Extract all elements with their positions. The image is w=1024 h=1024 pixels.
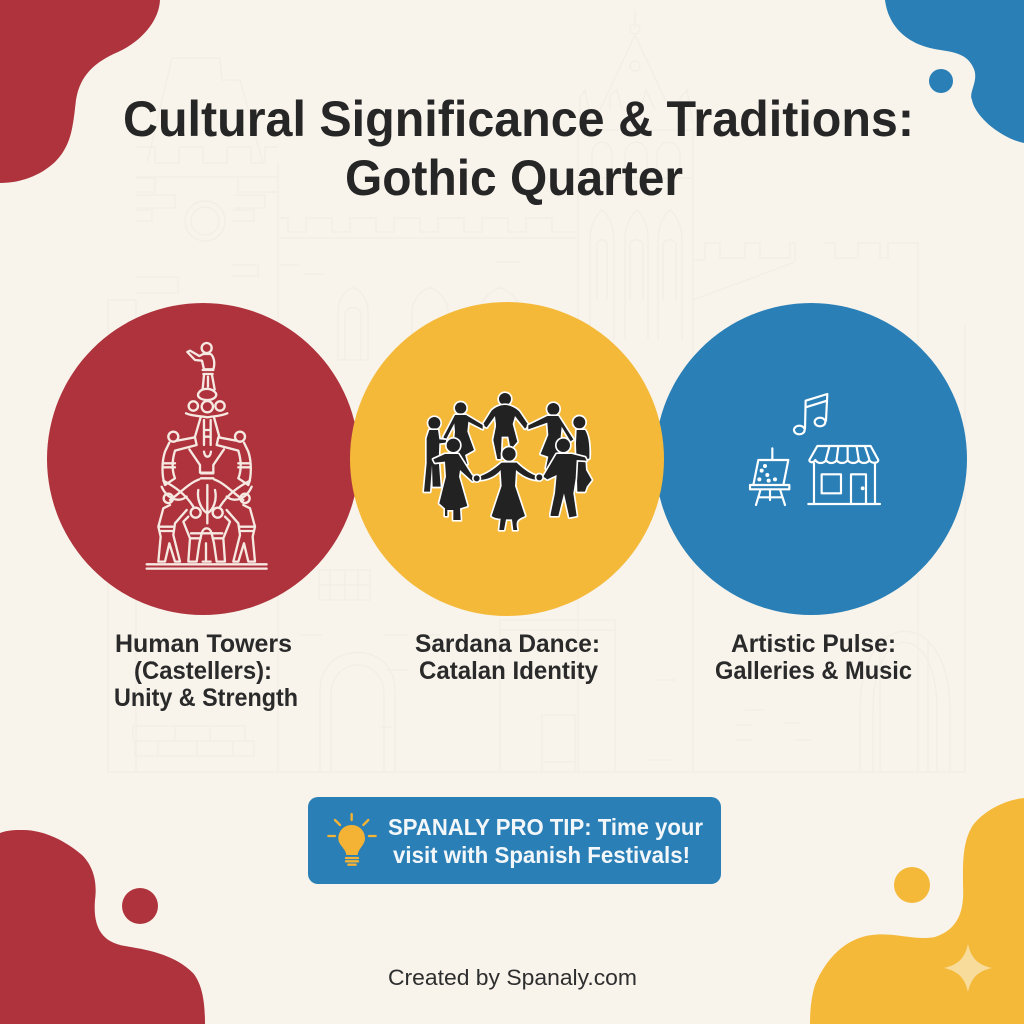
icon: human tower bbox=[147, 343, 267, 569]
title: Gothic Quarter bbox=[345, 150, 683, 206]
label: artistic pulse: Artistic Pulse: bbox=[731, 630, 896, 658]
background: Gothic Quarter building outline bbox=[108, 10, 965, 772]
blob: top-left red bbox=[0, 0, 160, 183]
panel: artistic pulse circle bbox=[655, 303, 967, 615]
icon: sparkle bbox=[944, 944, 992, 992]
callout: pro tip bbox=[308, 797, 721, 884]
icon: music notes bbox=[794, 394, 827, 434]
panel: human towers circle bbox=[47, 303, 359, 615]
text: pro tip: visit with Spanish Festivals! bbox=[393, 842, 690, 868]
dot: yellow bbox=[894, 867, 930, 903]
text: pro tip bbox=[388, 814, 703, 868]
icon: light bulb bbox=[328, 814, 376, 865]
label: sardana dance: Catalan Identity bbox=[419, 657, 598, 685]
label: human towers bbox=[114, 630, 298, 712]
footer credit: Created by Spanaly.com bbox=[388, 965, 637, 990]
icon: gallery storefront bbox=[808, 446, 880, 504]
label: human towers: Human Towers bbox=[115, 630, 292, 658]
blob: bottom-left red bbox=[0, 830, 205, 1024]
blob: top-right blue bbox=[885, 0, 1024, 143]
title: Cultural Significance & Traditions: bbox=[123, 91, 914, 147]
back row dancers bbox=[424, 393, 592, 492]
icon: sardana dancers ring bbox=[424, 393, 592, 530]
text: pro tip: SPANALY PRO TIP: Time your bbox=[388, 814, 703, 840]
dot: blue bbox=[929, 69, 953, 93]
label: artistic pulse bbox=[715, 630, 912, 685]
icon: easel bbox=[750, 448, 789, 505]
label: human towers: Unity & Strength bbox=[114, 684, 298, 712]
label: sardana dance: Sardana Dance: bbox=[415, 630, 600, 658]
title bbox=[123, 91, 914, 206]
panel: sardana dance circle bbox=[350, 302, 664, 616]
front row dancers bbox=[433, 439, 587, 530]
icon: music, easel and gallery bbox=[750, 394, 880, 505]
label: sardana dance bbox=[415, 630, 600, 685]
dot: red bbox=[122, 888, 158, 924]
label: artistic pulse: Galleries & Music bbox=[715, 657, 912, 685]
blob: bottom-right yellow bbox=[810, 798, 1024, 1024]
label: human towers: (Castellers): bbox=[134, 657, 272, 685]
